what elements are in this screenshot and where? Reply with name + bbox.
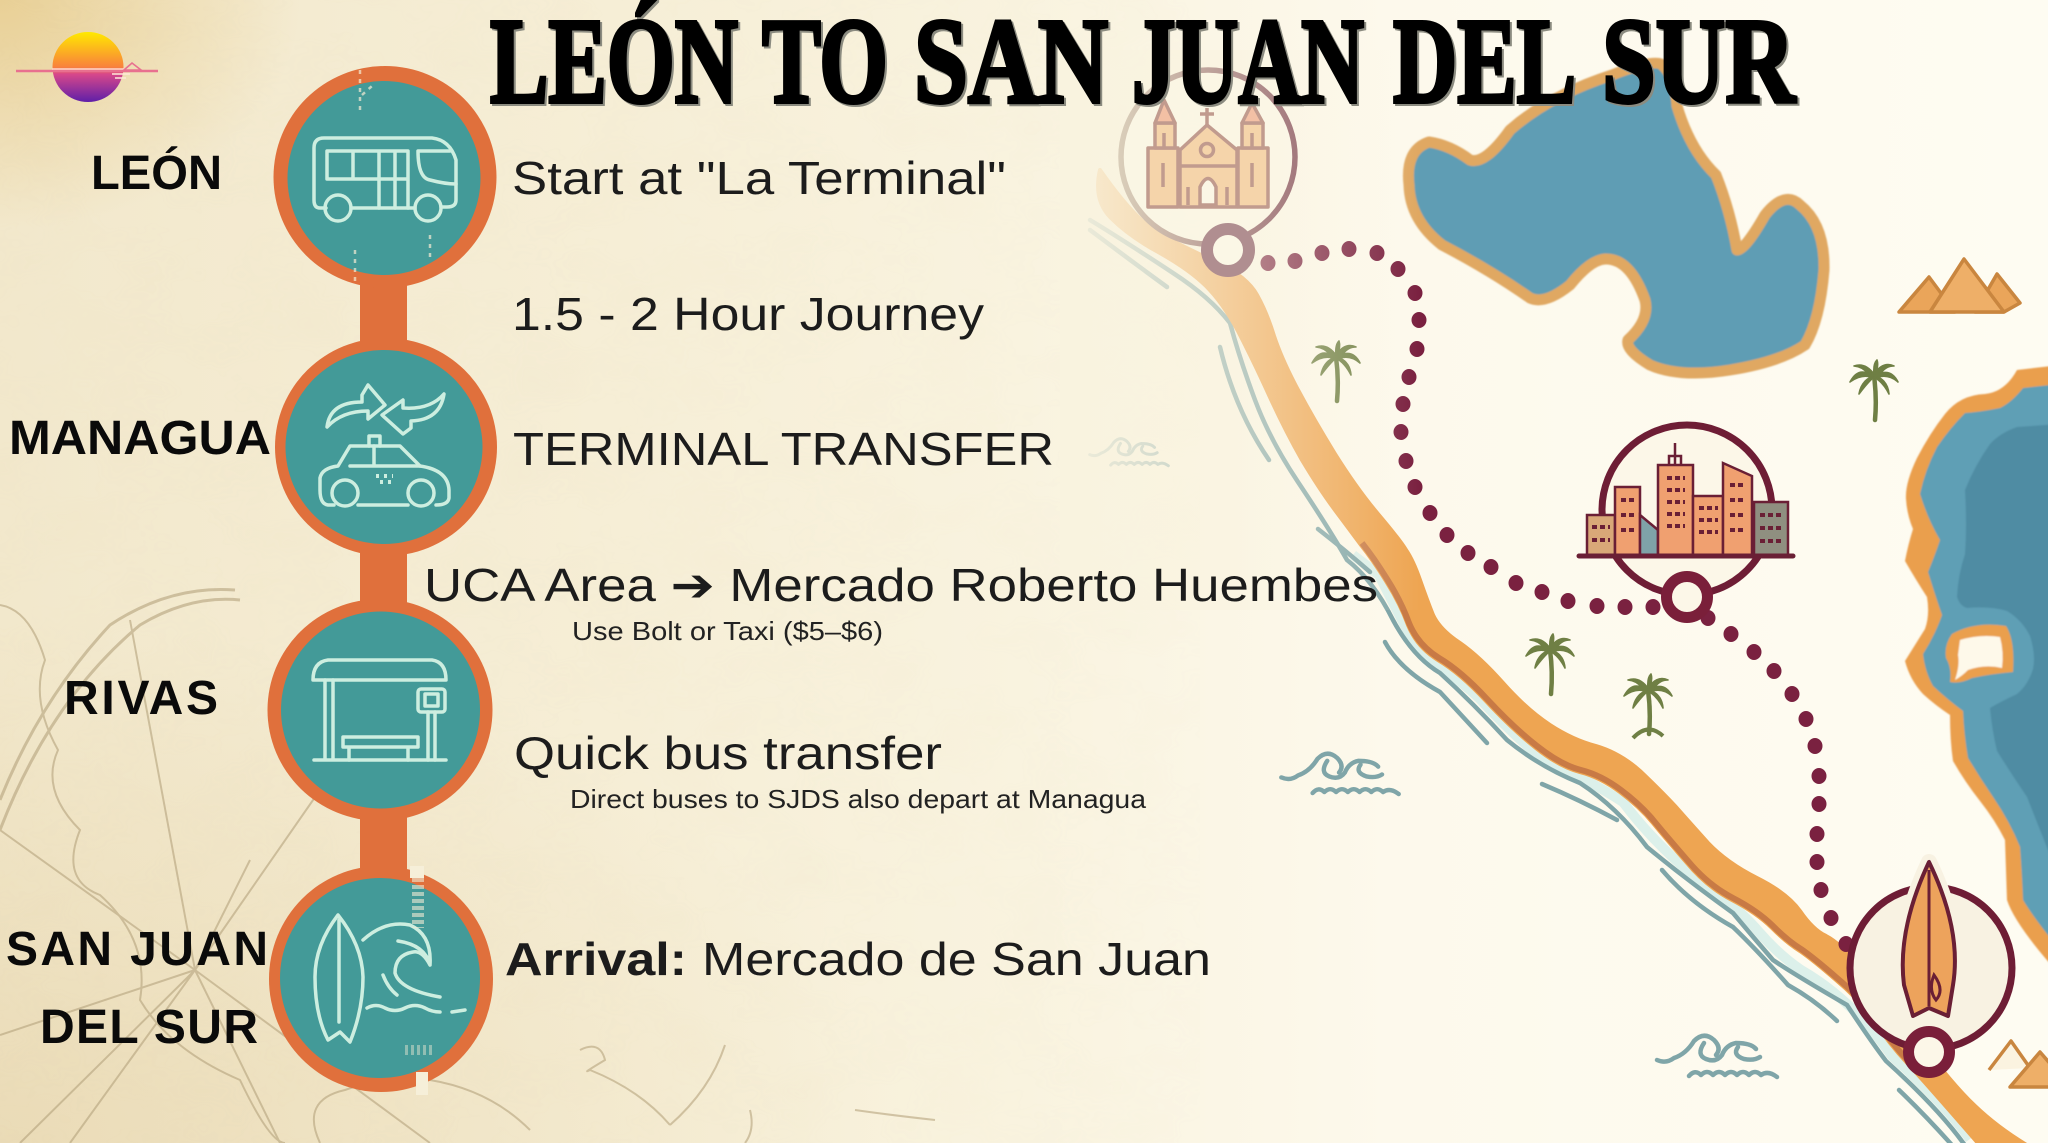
- title: SUR: [1604, 0, 1798, 131]
- pin: San Juan del Sur surfboard: [1850, 862, 2012, 1072]
- route: dotted path: [1260, 241, 1854, 952]
- step text: start: Start at "La Terminal": [512, 152, 1006, 204]
- palm tree 3: [1526, 634, 1574, 694]
- wave mark middle: [1281, 754, 1399, 794]
- title: JUAN: [1134, 0, 1366, 131]
- step text: quick bus transfer: Quick bus transfer: [514, 727, 942, 779]
- step text: arrival: Arrival:: [505, 933, 687, 985]
- step text: arrival: [505, 933, 1211, 985]
- title: DEL: [1395, 0, 1578, 131]
- title: [490, 0, 1798, 131]
- pin: Managua city: [1579, 425, 1793, 618]
- palm tree 2: [1850, 360, 1898, 420]
- stop label: Rivas: RIVAS: [64, 672, 218, 725]
- map fade overlay: [1060, 50, 1420, 610]
- stop 3: bus stop icon: [268, 599, 492, 821]
- pin: León cathedral: [1121, 70, 1295, 271]
- palm tree 4: [1624, 674, 1672, 738]
- route timeline column: [268, 66, 497, 1095]
- connector bars: [360, 280, 407, 875]
- title: TO: [764, 0, 890, 131]
- palm tree 1: [1312, 341, 1360, 401]
- map: Pacific coast sand strip: [1098, 170, 2035, 1143]
- step text: UCA to Mercado: UCA Area ➔ Mercado Roberto Huembes: [424, 559, 1378, 611]
- stop label: León: LEÓN: [91, 145, 222, 200]
- map: Lake Nicaragua: [1905, 365, 2048, 975]
- step note: Bolt or taxi: Use Bolt or Taxi ($5–$6): [572, 616, 883, 646]
- antique map sketch lines: [0, 589, 935, 1143]
- map: upper lake: [1408, 63, 1824, 373]
- stop label: San Juan del Sur: [6, 923, 268, 1054]
- stop label: San Juan del Sur: SAN JUAN: [6, 923, 268, 976]
- mountains bottom right: [1989, 1041, 2048, 1087]
- step note: direct buses: Direct buses to SJDS also depart at Managua: [570, 784, 1147, 814]
- title: SAN: [916, 0, 1110, 131]
- stop 1: bus icon: [274, 66, 496, 288]
- step text: terminal transfer: TERMINAL TRANSFER: [513, 423, 1054, 475]
- map: right side of page: [1060, 50, 2048, 1143]
- step text: arrival: Mercado de San Juan: [702, 933, 1211, 985]
- stop 4: surfboard and wave icon: [269, 866, 493, 1095]
- title: LEÓN: [492, 0, 740, 131]
- map: island in lake: [1946, 625, 2013, 682]
- map: coastal water lines: [1090, 220, 1970, 1143]
- step text: journey duration: 1.5 - 2 Hour Journey: [512, 288, 984, 340]
- wave mark bottom: [1657, 1036, 1777, 1077]
- stop 2: taxi and arrows icon: [275, 338, 497, 556]
- stop label: San Juan del Sur: DEL SUR: [40, 1001, 258, 1054]
- wave mark faded: [1090, 439, 1168, 466]
- stop label: Managua: MANAGUA: [9, 412, 271, 465]
- mountains top right: [1899, 259, 2020, 312]
- logo: sunset: [16, 32, 158, 102]
